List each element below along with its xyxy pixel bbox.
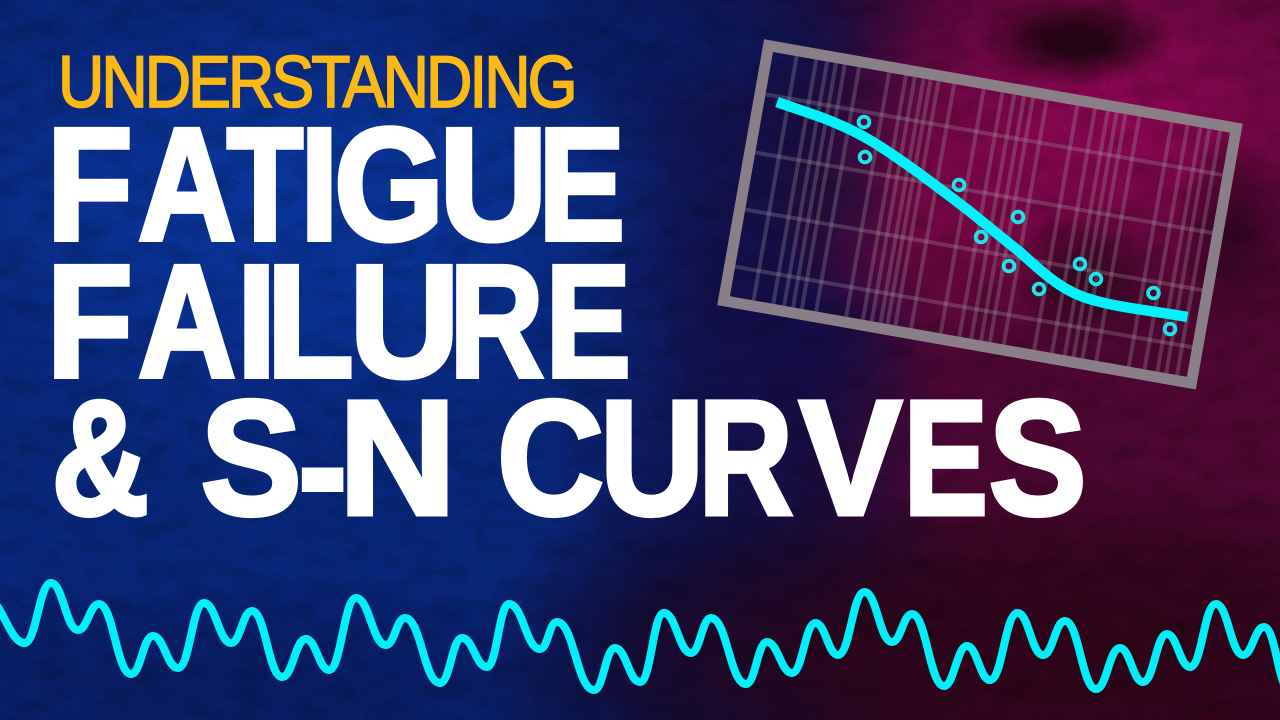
title: fatigue: G xyxy=(334,94,444,273)
title: and S-N curves: S xyxy=(201,368,302,549)
title: and S-N curves: & xyxy=(52,367,149,549)
title: and S-N curves: C xyxy=(497,366,604,549)
title: and S-N curves: R xyxy=(698,367,793,549)
title: failure: A xyxy=(138,233,236,411)
title: and S-N curves xyxy=(52,366,1086,557)
chart grid and frame xyxy=(724,46,1236,383)
title: and S-N curves: E xyxy=(904,366,988,549)
title: and S-N curves: V xyxy=(799,367,902,549)
title: and S-N curves: U xyxy=(600,367,704,549)
title: fatigue: E xyxy=(539,94,625,274)
title: failure: F xyxy=(47,232,133,411)
title: failure: E xyxy=(546,232,631,411)
data point markers xyxy=(859,117,1175,334)
title: failure: L xyxy=(267,233,354,411)
title: failure: I xyxy=(237,232,276,411)
title: failure xyxy=(47,232,631,411)
title: fatigue: A xyxy=(138,96,236,274)
fatigue load waveform xyxy=(0,583,1280,690)
title: and S-N curves: - xyxy=(298,374,347,557)
title: fatigue: I xyxy=(300,95,338,274)
title: failure: U xyxy=(350,233,460,411)
title: and S-N curves: S xyxy=(989,367,1086,549)
title: understanding: UNDERSTANDING xyxy=(58,41,575,123)
title: fatigue: F xyxy=(47,95,133,274)
title: fatigue: T xyxy=(227,96,303,274)
title: fatigue xyxy=(47,94,625,274)
chart: S-N curve on tilted log grid xyxy=(724,46,1236,383)
title: fatigue: U xyxy=(439,95,547,274)
title: failure: R xyxy=(450,232,544,410)
S-N fitted curve xyxy=(777,102,1188,317)
title: and S-N curves: N xyxy=(339,367,456,549)
